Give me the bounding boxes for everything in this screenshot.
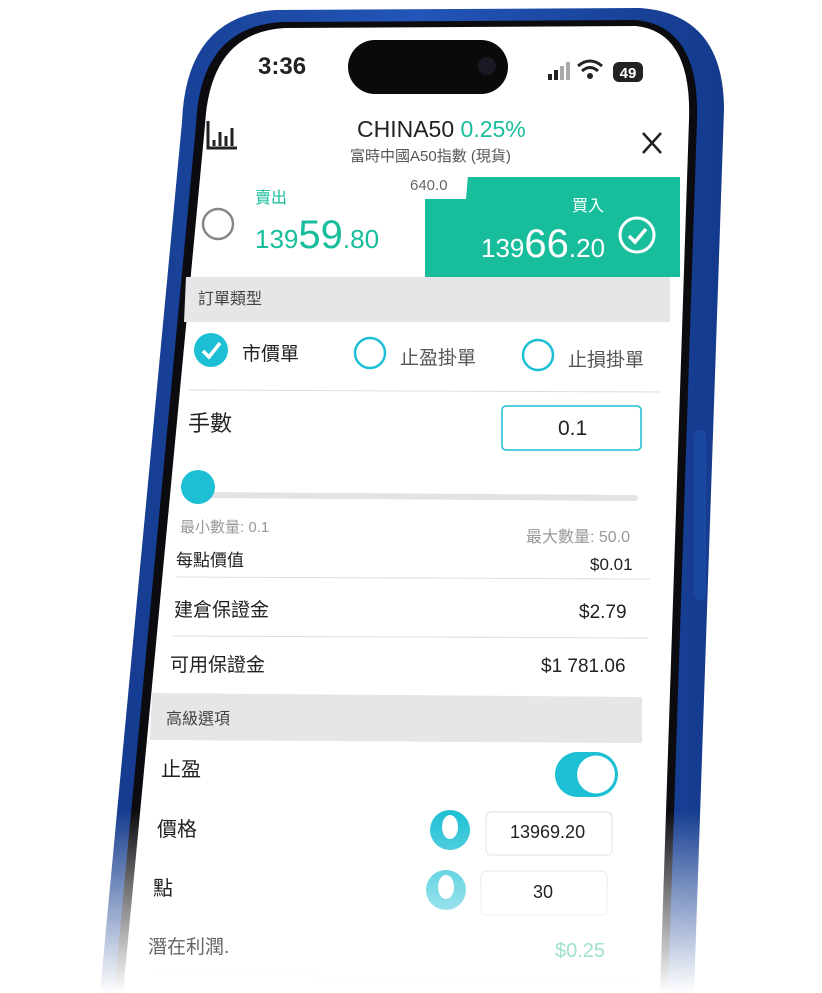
toggle [555,752,618,797]
chart icon [208,121,237,148]
text: 富時中國A50指數 (現貨) [350,148,511,165]
status time: 3:36 [258,53,306,80]
buy box [425,177,680,277]
text: 最大數量: 50.0 [526,529,630,546]
buy check [620,218,654,252]
text: 13966.20 [481,222,605,266]
sell radio [203,209,233,239]
text: 點 [153,878,173,900]
input box [502,406,641,450]
text: 建倉保證金 [174,600,269,621]
divider lines [188,390,660,392]
buy panel: 買入 [572,198,604,215]
order types: 市價單 [242,344,299,365]
text: 0.1 [558,417,587,440]
text: 13959.80 [255,213,379,257]
take profit: 止盈 [161,759,201,781]
text: 價格 [157,819,197,841]
info rows: 每點價值 [176,551,244,570]
text: 640.0 [410,177,448,194]
advanced header: 高級選項 [166,711,230,728]
gray band advanced [150,693,642,743]
text: $0.01 [590,555,633,574]
text: 可用保證金 [170,655,265,676]
text: $2.79 [579,602,627,623]
gray band order type [184,277,670,322]
dynamic island [348,40,508,94]
header title: CHINA50 0.25% [357,116,526,142]
stepper icons [430,810,470,850]
text: 30 [533,882,553,902]
text: 最小數量: 0.1 [180,519,269,536]
text: 止盈掛單 [400,348,476,369]
sell panel: 賣出 [255,190,287,207]
slider [198,495,635,498]
text: 潛在利潤. [148,937,229,958]
phone frame: 49 [620,65,636,82]
lots: 手數 [188,411,232,436]
text: 13969.20 [510,822,585,842]
text: $0.25 [555,940,605,962]
text: $1 781.06 [541,656,626,677]
close icon [643,133,661,153]
order type header: 訂單類型 [198,291,262,308]
order type radios [194,333,228,367]
status icons [548,62,570,80]
text: 止損掛單 [568,350,644,371]
